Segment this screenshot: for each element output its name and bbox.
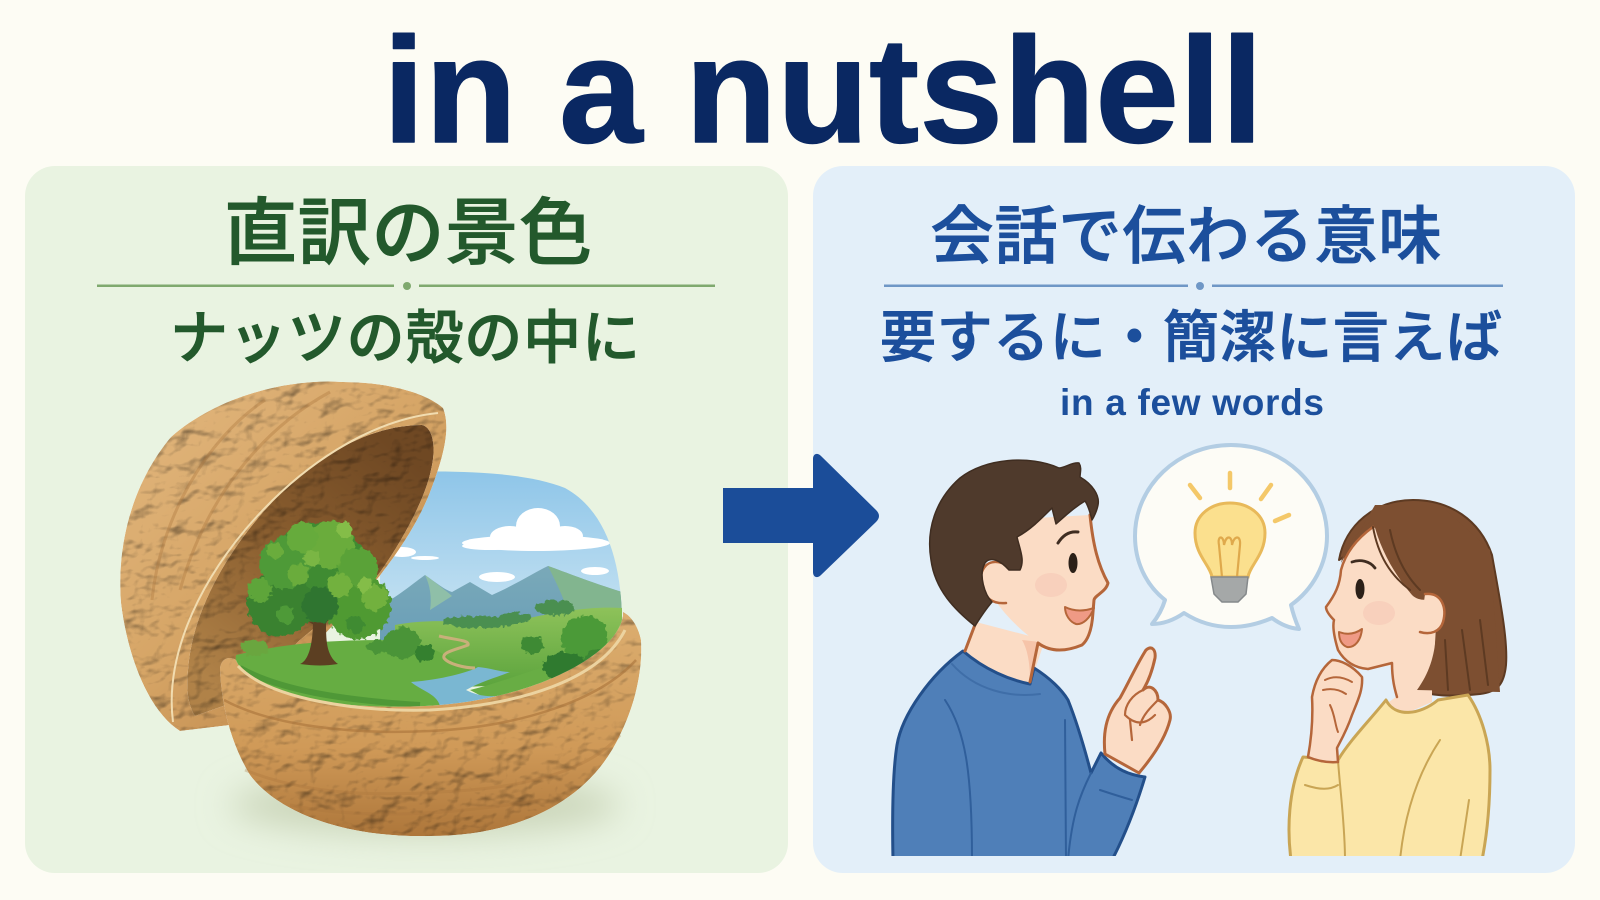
panel background: blue	[813, 166, 1575, 873]
man eyebrow	[1058, 532, 1078, 543]
landscape: sky and mountains	[380, 472, 622, 640]
woman mouth	[1339, 629, 1362, 647]
man neck shade	[1022, 640, 1037, 675]
woman face outline	[1326, 527, 1397, 697]
woman eyebrow	[1352, 561, 1375, 568]
bubble outline	[1135, 445, 1327, 629]
far hills	[395, 608, 622, 690]
bushes	[241, 616, 616, 682]
man finger lines	[1125, 690, 1158, 740]
river	[411, 667, 510, 708]
subheading: in short: 要するに・簡潔に言えば	[880, 306, 1502, 369]
walnut ground shadow	[230, 775, 620, 835]
character: man pointing	[893, 460, 1170, 860]
bowl lip edge	[224, 660, 636, 732]
title: in a nutshell	[383, 6, 1263, 174]
man hair	[930, 460, 1098, 626]
illustration: walnut with landscape	[120, 381, 641, 836]
bowl rim highlight	[238, 630, 625, 710]
lower walnut shell	[220, 612, 641, 836]
man face outline	[965, 515, 1108, 682]
man sweater	[893, 651, 1145, 860]
man neck fill	[965, 622, 1045, 684]
woman ear	[1420, 594, 1444, 633]
woman neck	[1389, 660, 1432, 711]
woman finger lines	[1323, 677, 1352, 732]
woman eye	[1356, 579, 1364, 599]
woman sweater	[1289, 695, 1490, 860]
tree	[247, 521, 391, 666]
tree canopy	[247, 521, 391, 639]
bulb rays	[1190, 473, 1289, 521]
winding path	[439, 636, 475, 668]
panel: literal scene	[25, 166, 788, 873]
distant trees	[442, 600, 575, 628]
shell outer grooves	[152, 392, 330, 600]
mid meadow	[470, 640, 622, 706]
woman hair back	[1339, 500, 1506, 696]
bulb base	[1211, 577, 1248, 602]
woman face	[1326, 527, 1440, 669]
man face	[995, 515, 1108, 650]
divider: blue	[884, 282, 1503, 290]
bulb glass	[1195, 503, 1265, 577]
woman blush	[1363, 601, 1395, 625]
man eye	[1068, 553, 1078, 573]
character: woman thinking	[1289, 500, 1506, 860]
mountains	[380, 566, 622, 640]
man mouth	[1065, 607, 1094, 624]
woman hair strands	[1373, 527, 1488, 690]
bulb filament	[1219, 538, 1240, 577]
shell interior	[187, 425, 434, 716]
bowl outer surface	[220, 612, 641, 836]
clouds	[388, 508, 610, 582]
tree trunk	[300, 620, 338, 666]
bowl grooves	[245, 735, 620, 814]
landscape: ground, tree and river	[236, 521, 622, 712]
man pointing hand	[1104, 648, 1170, 773]
panel: conversational meaning	[813, 166, 1575, 873]
english gloss: in a few words	[1060, 382, 1324, 423]
man collar rib	[952, 664, 1040, 695]
arrow: literal to figurative	[723, 454, 879, 577]
man sleeve folds	[945, 700, 1132, 860]
man ear	[981, 562, 1006, 603]
woman hand on chin	[1308, 660, 1362, 762]
woman sweater folds	[1305, 740, 1469, 860]
subheading: inside a nut shell: ナッツの殻の中に	[170, 306, 640, 371]
divider: green	[97, 282, 715, 290]
woman front hair	[1341, 505, 1500, 692]
heading: meaning in conversation: 会話で伝わる意味	[930, 202, 1442, 272]
speech bubble with light bulb	[1135, 445, 1327, 629]
upper walnut shell	[120, 381, 446, 731]
shell rim highlight	[172, 413, 438, 722]
heading: literal scene: 直訳の景色	[224, 193, 592, 274]
shell outer surface	[120, 381, 446, 731]
foreground meadow	[236, 640, 470, 712]
meadow tufts	[240, 668, 420, 705]
man blush	[1035, 573, 1067, 597]
panel background: green	[25, 166, 788, 873]
